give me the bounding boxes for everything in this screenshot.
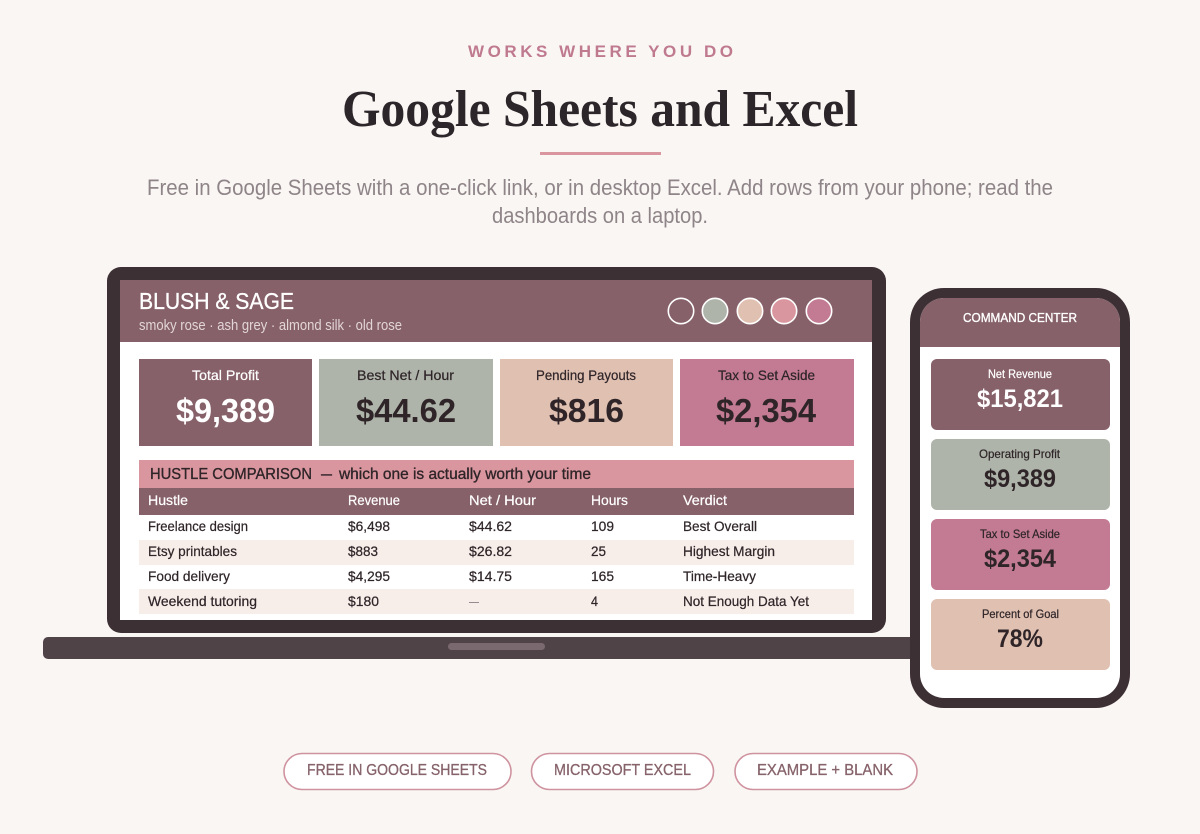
- table header row: Verdict: [683, 492, 727, 508]
- phone header: [920, 298, 1120, 347]
- colour swatches: [668, 298, 832, 324]
- row: food delivery: $14.75: [469, 568, 512, 584]
- table banner: —: [321, 466, 332, 483]
- laptop trackpad notch: [448, 643, 545, 650]
- phone header: COMMAND CENTER: [963, 310, 1077, 325]
- row: etsy printables: 25: [591, 543, 606, 559]
- row: weekend tutoring: [139, 589, 854, 614]
- badge: free in google sheets: FREE IN GOOGLE SHEETS: [307, 762, 487, 779]
- row: freelance design: Best Overall: [683, 518, 757, 534]
- subtitle: dashboards on a laptop.: [492, 203, 708, 228]
- panel: laptop: [107, 267, 886, 633]
- table banner: HUSTLE COMPARISON: [150, 466, 312, 483]
- laptop screen: [120, 280, 872, 620]
- title: Google Sheets and Excel: [342, 81, 858, 138]
- KPI card: total profit: $9,389: [176, 392, 275, 429]
- row: weekend tutoring: Weekend tutoring: [148, 593, 257, 609]
- theme name: BLUSH & SAGE: [139, 288, 294, 314]
- table header row: Hustle: [148, 492, 188, 508]
- row: weekend tutoring: —: [469, 593, 479, 609]
- table banner: [139, 460, 854, 488]
- phone card: operating profit: $9,389: [984, 465, 1056, 493]
- eyebrow: WORKS WHERE YOU DO: [468, 42, 733, 61]
- row: etsy printables: Highest Margin: [683, 543, 775, 559]
- phone card: net revenue: $15,821: [977, 385, 1063, 413]
- KPI card: best net per hour: [319, 359, 493, 446]
- laptop frame: [107, 267, 886, 633]
- table header row: Hours: [591, 492, 628, 508]
- row: freelance design: [148, 518, 757, 534]
- phone card: operating profit: Operating Profit: [979, 447, 1061, 461]
- table: hustle comparison: [139, 488, 854, 614]
- phone card: operating profit: [931, 439, 1110, 510]
- row: etsy printables: $26.82: [469, 543, 512, 559]
- KPI card: tax to set aside: $2,354: [716, 392, 817, 429]
- row: food delivery: [148, 568, 756, 584]
- row: food delivery: Time-Heavy: [683, 568, 756, 584]
- table header row: Net / Hour: [469, 492, 536, 508]
- row: weekend tutoring: Not Enough Data Yet: [683, 593, 809, 609]
- KPI card: pending payouts: $816: [549, 392, 624, 429]
- row: etsy printables: [139, 540, 854, 565]
- KPI card: pending payouts: Pending Payouts: [536, 367, 636, 383]
- phone card: percent of goal: [931, 599, 1110, 670]
- laptop base: [43, 637, 923, 659]
- KPI card: pending payouts: [500, 359, 673, 446]
- phone card: net revenue: Net Revenue: [988, 367, 1052, 381]
- table banner: which one is actually worth your time: [338, 466, 591, 483]
- row: etsy printables: $883: [348, 543, 378, 559]
- table header row: Revenue: [348, 492, 400, 508]
- row: food delivery: $4,295: [348, 568, 390, 584]
- KPI card: tax to set aside: [680, 359, 854, 446]
- row: weekend tutoring: $180: [348, 593, 379, 609]
- phone card: percent of goal: 78%: [997, 625, 1043, 653]
- badge: example and blank: EXAMPLE + BLANK: [757, 762, 893, 779]
- phone card: tax to set aside: Tax to Set Aside: [980, 527, 1060, 541]
- phone card: tax to set aside: $2,354: [984, 545, 1056, 573]
- row: weekend tutoring: 4: [591, 593, 598, 609]
- panel: phone: [910, 288, 1130, 708]
- KPI card: total profit: Total Profit: [192, 367, 259, 383]
- phone card: tax to set aside: [931, 519, 1110, 590]
- phone frame: [910, 288, 1130, 708]
- KPI card: best net per hour: $44.62: [356, 392, 456, 429]
- badge: microsoft excel: MICROSOFT EXCEL: [554, 762, 691, 779]
- title underline: [540, 152, 661, 155]
- theme colours caption: smoky rose · ash grey · almond silk · old rose: [139, 318, 402, 334]
- row: food delivery: 165: [591, 568, 614, 584]
- KPI card: best net per hour: Best Net / Hour: [357, 367, 454, 383]
- row: freelance design: $6,498: [348, 518, 390, 534]
- badge: example and blank: [735, 754, 917, 790]
- KPI card: total profit: [139, 359, 312, 446]
- row: freelance design: 109: [591, 518, 614, 534]
- phone card: net revenue: [931, 359, 1110, 430]
- badge: microsoft excel: [532, 754, 714, 790]
- phone screen: [920, 298, 1120, 698]
- phone card: percent of goal: Percent of Goal: [982, 607, 1059, 621]
- table header row: [139, 488, 854, 515]
- KPI card: tax to set aside: Tax to Set Aside: [718, 367, 815, 383]
- badge: free in google sheets: [284, 754, 511, 790]
- row: etsy printables: Etsy printables: [148, 543, 237, 559]
- subtitle: [147, 175, 1053, 228]
- sheet header: [120, 280, 872, 342]
- row: freelance design: $44.62: [469, 518, 512, 534]
- subtitle: Free in Google Sheets with a one-click link, or in desktop Excel. Add rows from your phone; read the: [147, 175, 1053, 200]
- row: freelance design: Freelance design: [148, 518, 248, 534]
- row: food delivery: Food delivery: [148, 568, 230, 584]
